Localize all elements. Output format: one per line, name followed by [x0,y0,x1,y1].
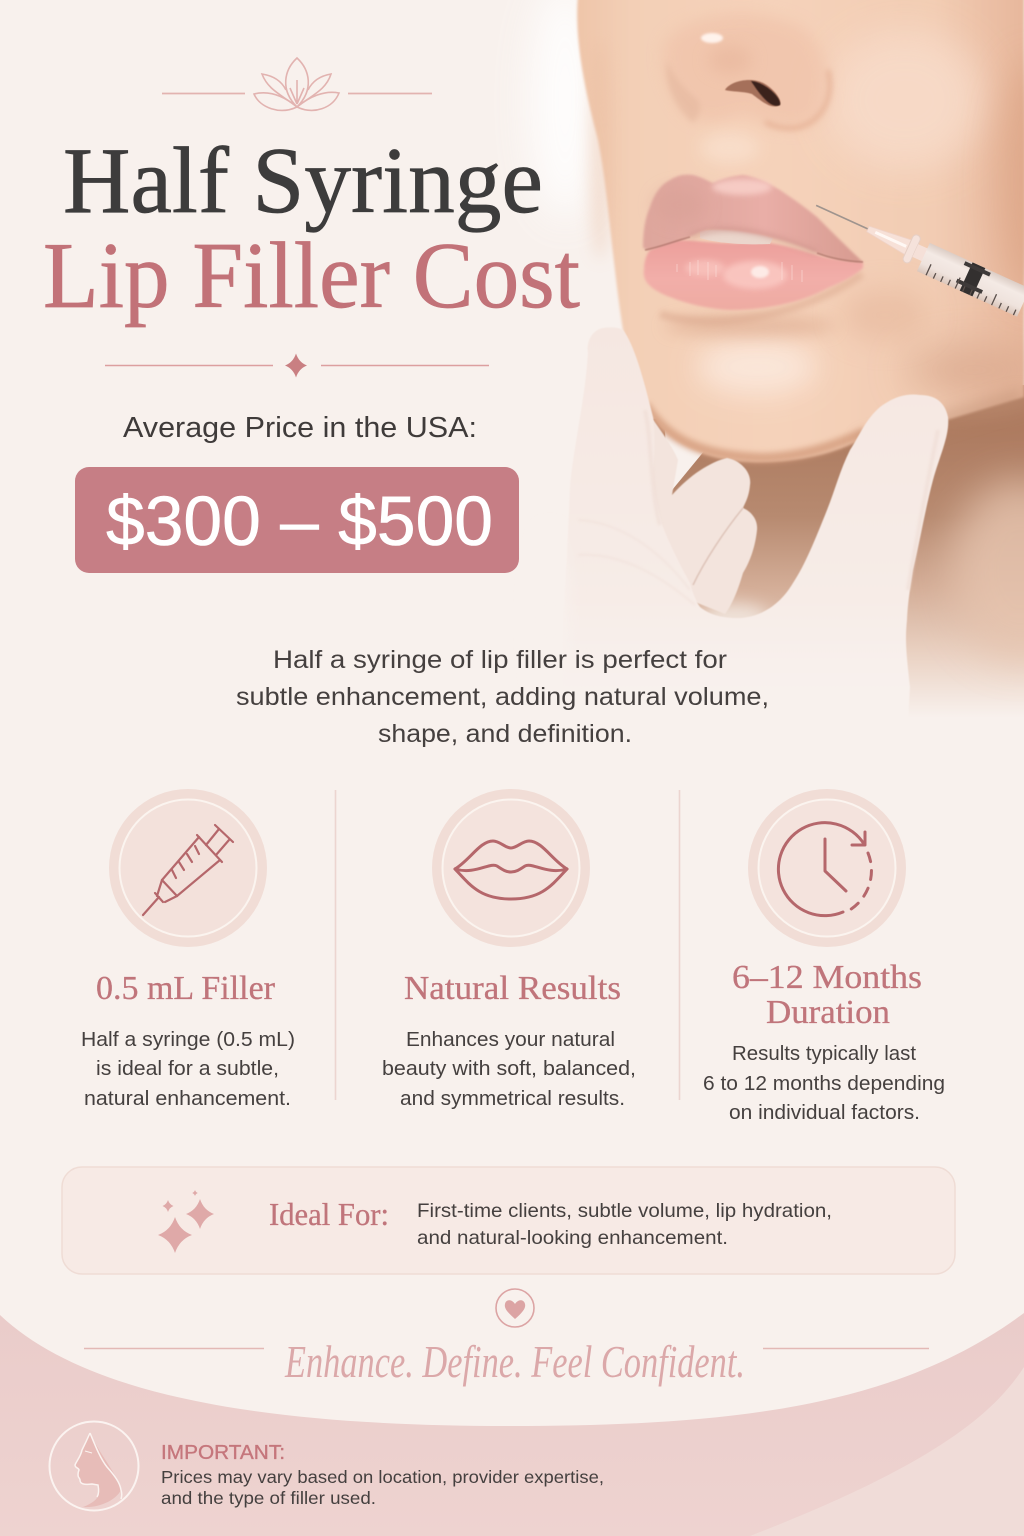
icon: clock [748,789,906,947]
description: 6 to 12 months depending [703,1072,945,1095]
heading: Natural Results [404,970,621,1007]
price label: Average Price in the USA: [123,412,477,444]
icon: sparkles [158,1190,214,1253]
footer lighter curve [750,1367,1024,1536]
important note [161,1442,604,1508]
important note: IMPORTANT: [161,1442,285,1464]
description: on individual factors. [729,1101,920,1124]
fade under glove left edge [532,530,568,710]
nose [663,14,830,164]
glove thumb, palm and forefinger [560,327,948,770]
intro paragraph [236,646,769,748]
facial shading [590,30,1024,458]
description: and symmetrical results. [400,1087,625,1110]
column dividers [336,790,680,1100]
description: Enhances your natural [406,1028,615,1051]
title divider [105,354,489,378]
title: Half Syringe [63,129,543,233]
title [43,129,580,328]
description [417,1200,832,1249]
price badge [75,467,519,573]
syringe [809,192,1024,317]
photo: lips being injected, gloved hand [532,0,1024,770]
price badge: $300 – $500 [106,482,493,560]
description: is ideal for a subtle, [96,1057,279,1080]
panel: ideal for [62,1167,955,1274]
jawline shadow [860,397,1024,445]
description: Results typically last [732,1042,916,1065]
icon: lotus ornament [162,58,432,110]
panel: 6-12 months duration [703,789,945,1124]
background gap between fingers [665,430,705,495]
description [81,1028,295,1110]
heading: 0.5 mL Filler [96,970,276,1007]
finger separation crease [693,508,743,585]
intro paragraph: shape, and definition. [378,720,632,748]
lips [643,175,863,321]
neck [640,385,1024,725]
description: Half a syringe (0.5 mL) [81,1028,295,1051]
soft white glow behind portrait [530,0,600,220]
description: natural enhancement. [84,1087,291,1110]
footer pink wave [0,1313,1024,1536]
label: Ideal For: [269,1196,389,1232]
description [382,1028,636,1110]
title: Lip Filler Cost [43,224,580,328]
icon: syringe [109,789,267,947]
icon: heart [496,1289,534,1327]
heading: 6–12 Months [732,959,922,996]
icon: woman profile [50,1422,138,1510]
description [703,1042,945,1124]
panel: natural results [382,789,636,1110]
description: First-time clients, subtle volume, lip hydration, [417,1200,832,1222]
glove finger behind thumb [650,415,757,614]
panel: 0.5 mL filler [81,789,295,1110]
description: beauty with soft, balanced, [382,1057,636,1080]
important note: and the type of filler used. [161,1488,376,1508]
tagline: Enhance. Define. Feel Confident. [284,1336,745,1387]
face [577,0,1024,462]
intro paragraph: subtle enhancement, adding natural volume, [236,683,769,711]
intro paragraph: Half a syringe of lip filler is perfect for [273,646,727,674]
icon: lips [432,789,590,947]
heading: Duration [766,994,890,1031]
description: and natural-looking enhancement. [417,1227,728,1249]
important note: Prices may vary based on location, provider expertise, [161,1467,604,1487]
heading [732,959,922,1031]
glove shading [578,410,938,605]
